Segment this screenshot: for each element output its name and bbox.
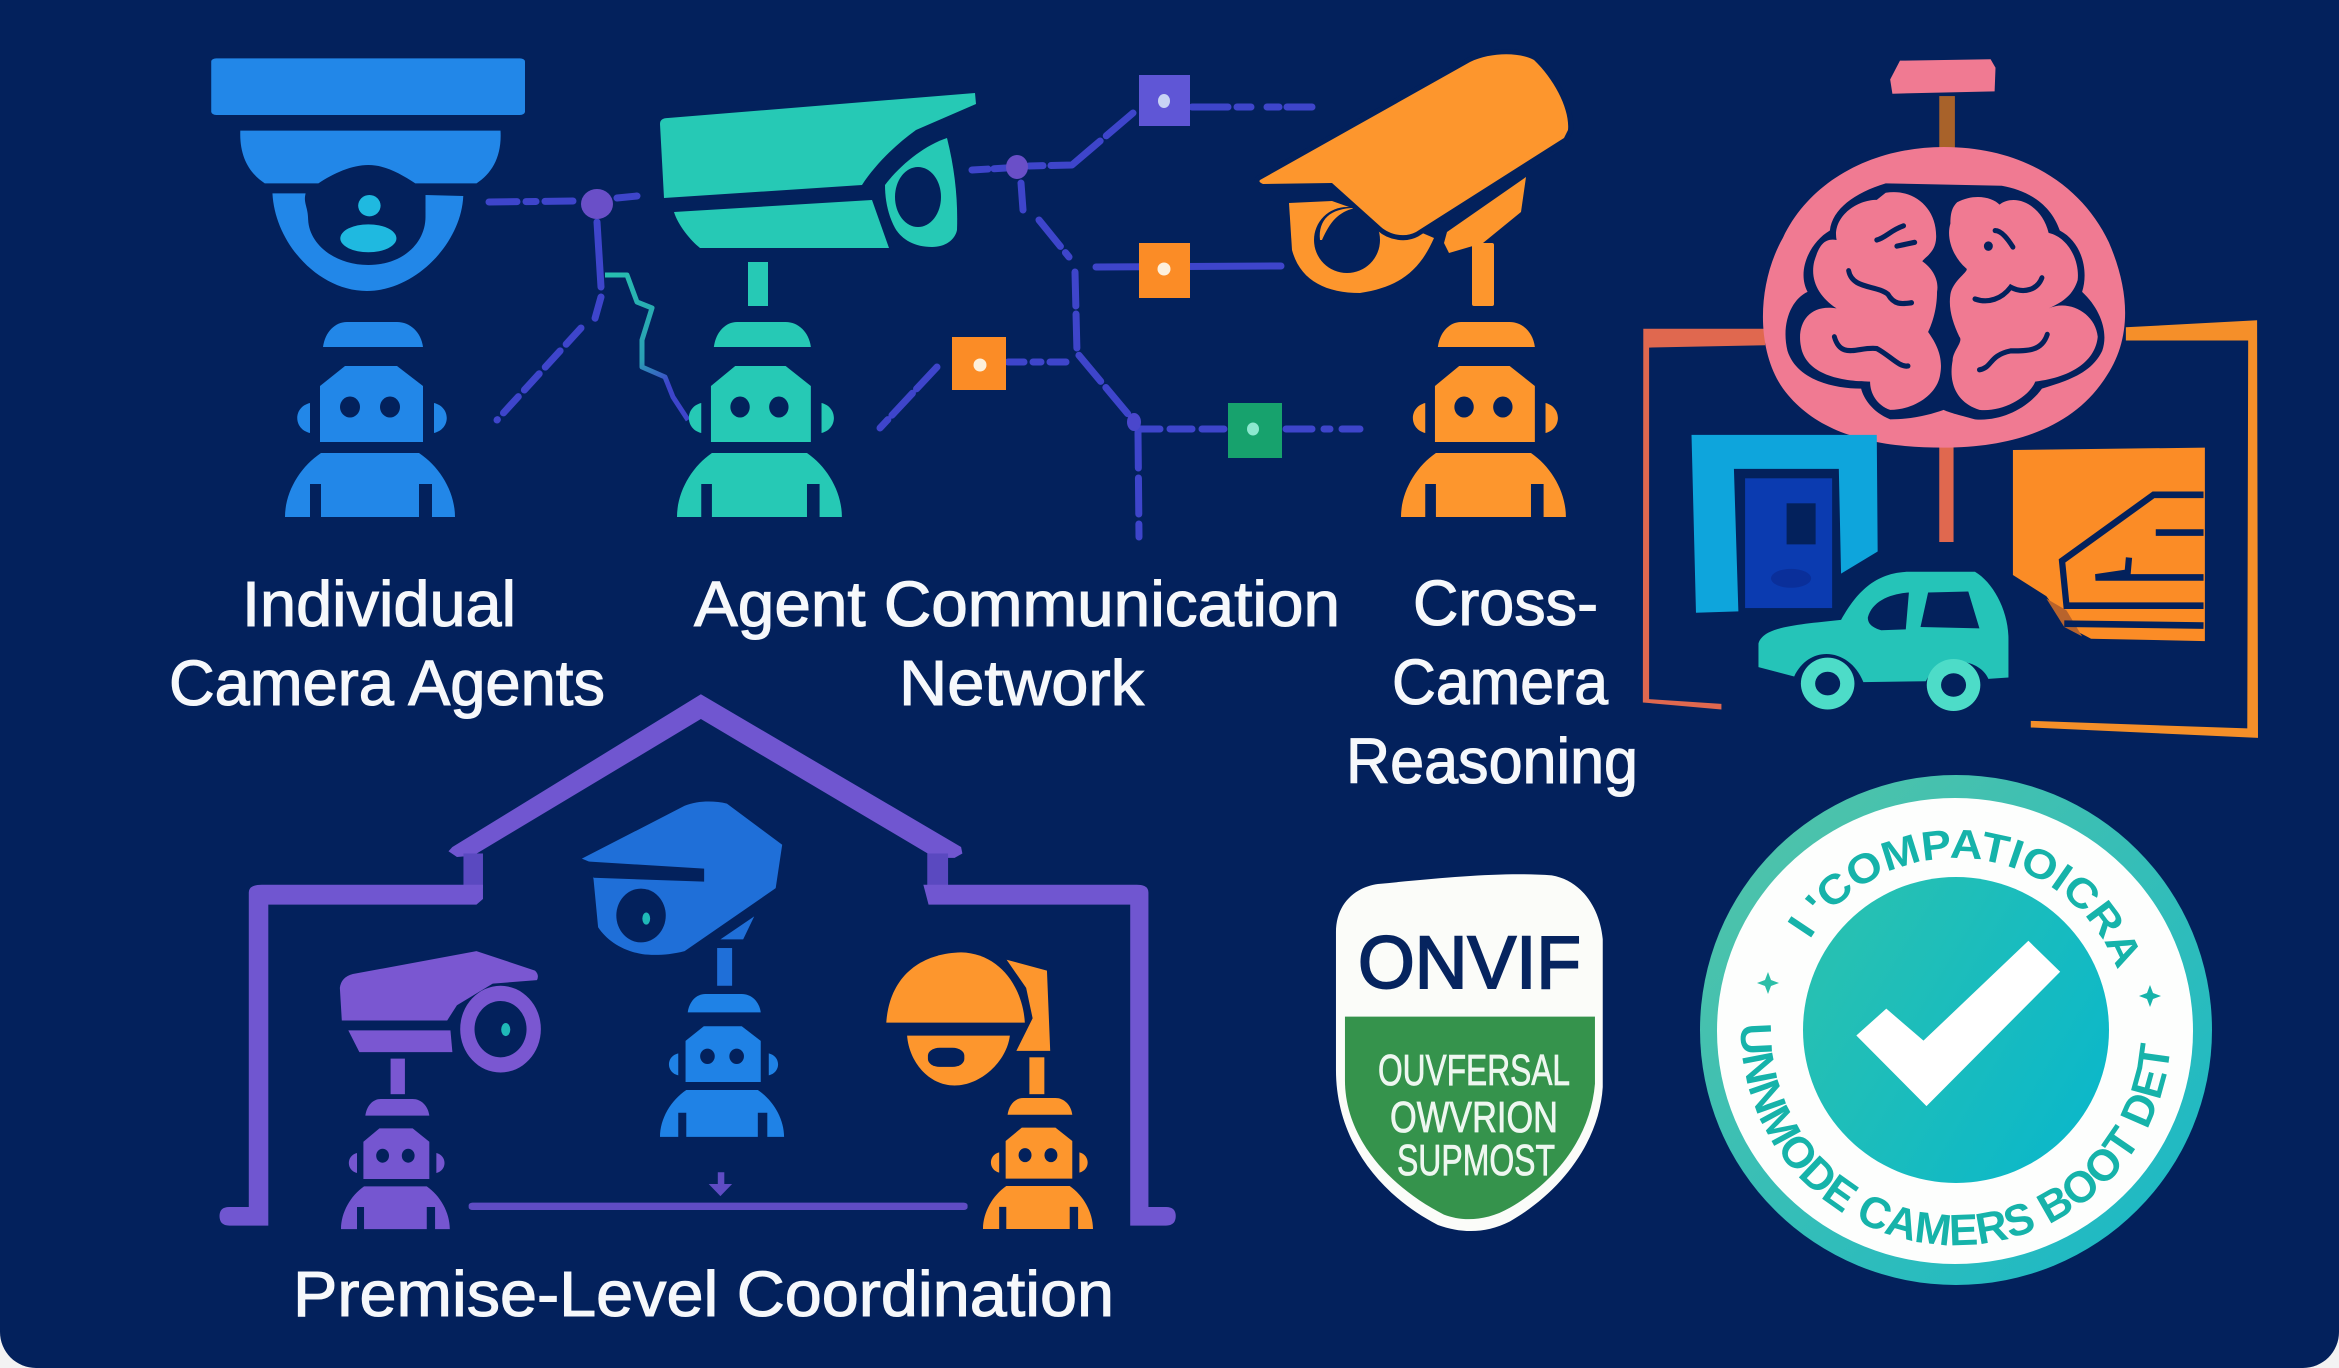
robot agent teal	[677, 322, 842, 517]
line: node to blue robot	[497, 297, 601, 420]
icon: dome camera blue	[211, 58, 525, 291]
line: second node left	[972, 168, 1006, 170]
line: green square left	[1138, 426, 1228, 432]
brain	[1763, 147, 2125, 448]
white ring	[1717, 798, 2193, 1264]
data square: green	[1228, 403, 1282, 458]
curved text top: I 'COMPATIOICRA	[1788, 830, 2138, 969]
onvif wordmark: ONVIF	[1358, 921, 1581, 1004]
house outline	[220, 694, 1176, 1226]
robot agent blue	[285, 322, 455, 517]
label: individual camera agents: Individual	[242, 568, 516, 640]
panel: cross-camera reasoning brain	[1643, 59, 2258, 738]
data square: orange one	[1139, 243, 1190, 298]
frame right	[2031, 320, 2258, 738]
centre stem	[1939, 445, 1954, 542]
line: second node to purple square	[1029, 113, 1133, 166]
icon: bullet camera teal	[660, 93, 976, 306]
shield text: OWVRION	[1390, 1093, 1558, 1142]
panel: premise-level coordination	[220, 694, 1176, 1229]
car	[1758, 572, 2008, 711]
line: second node trunk	[1021, 183, 1133, 420]
top mount	[1890, 59, 1996, 148]
badge: compatibility check	[1700, 775, 2212, 1285]
label: agent communication network: Agent Communication	[694, 568, 1340, 640]
label: cross-camera reasoning: Camera	[1392, 646, 1608, 718]
robot agent orange	[983, 1098, 1093, 1229]
node: second hub	[1006, 155, 1028, 179]
line: orange square two right	[1008, 358, 1067, 366]
curved text bottom: UNNMODE CAMERS BOOT DET	[1740, 1025, 2170, 1246]
robot agent orange	[1401, 322, 1566, 517]
data square: purple	[1139, 75, 1190, 126]
icon: bullet camera orange	[1259, 54, 1568, 306]
label: cross-camera reasoning	[1346, 567, 1638, 797]
outer ring	[1700, 775, 2212, 1285]
check mark	[1856, 941, 2060, 1106]
line: node downward	[597, 222, 601, 287]
camera purple	[340, 951, 541, 1094]
camera orange dome	[886, 952, 1050, 1094]
line: trunk down	[1138, 432, 1139, 537]
shield text: SUPMOST	[1397, 1136, 1555, 1185]
node: first hub	[581, 189, 613, 219]
line: node to right	[617, 196, 637, 198]
label: agent communication network	[694, 568, 1340, 719]
building tile orange	[2013, 448, 2205, 641]
line: orange square one	[1096, 266, 1281, 267]
label: agent communication network: Network	[899, 647, 1145, 719]
inner disc	[1803, 877, 2109, 1183]
label: individual camera agents	[169, 568, 605, 719]
shield	[1336, 874, 1603, 1231]
robot agent blue	[660, 994, 784, 1137]
node: third hub	[1127, 413, 1141, 431]
shield text: OUVFERSAL	[1378, 1046, 1570, 1095]
data square: orange two	[952, 337, 1006, 390]
line: orange square two left	[880, 367, 937, 428]
label: individual camera agents: Camera Agents	[169, 647, 605, 719]
frame left	[1643, 329, 1765, 710]
star left	[1757, 972, 1779, 994]
robot agent purple	[341, 1099, 450, 1229]
camera blue	[582, 802, 782, 986]
label: cross-camera reasoning: Cross-	[1413, 567, 1598, 639]
label: cross-camera reasoning: Reasoning	[1346, 725, 1638, 797]
label: premise-level coordination: Premise-Level Coordination	[293, 1258, 1114, 1330]
shield text	[1378, 1046, 1570, 1185]
star right	[2139, 985, 2161, 1007]
camera tile blue	[1692, 435, 1878, 613]
line: purple square right	[1192, 104, 1312, 110]
line: camera one to camera two	[489, 201, 576, 202]
line: green square right	[1286, 426, 1360, 432]
line: teal branch to teal robot	[605, 275, 688, 420]
badge: onvif	[1336, 874, 1603, 1231]
network connections	[489, 75, 1360, 537]
